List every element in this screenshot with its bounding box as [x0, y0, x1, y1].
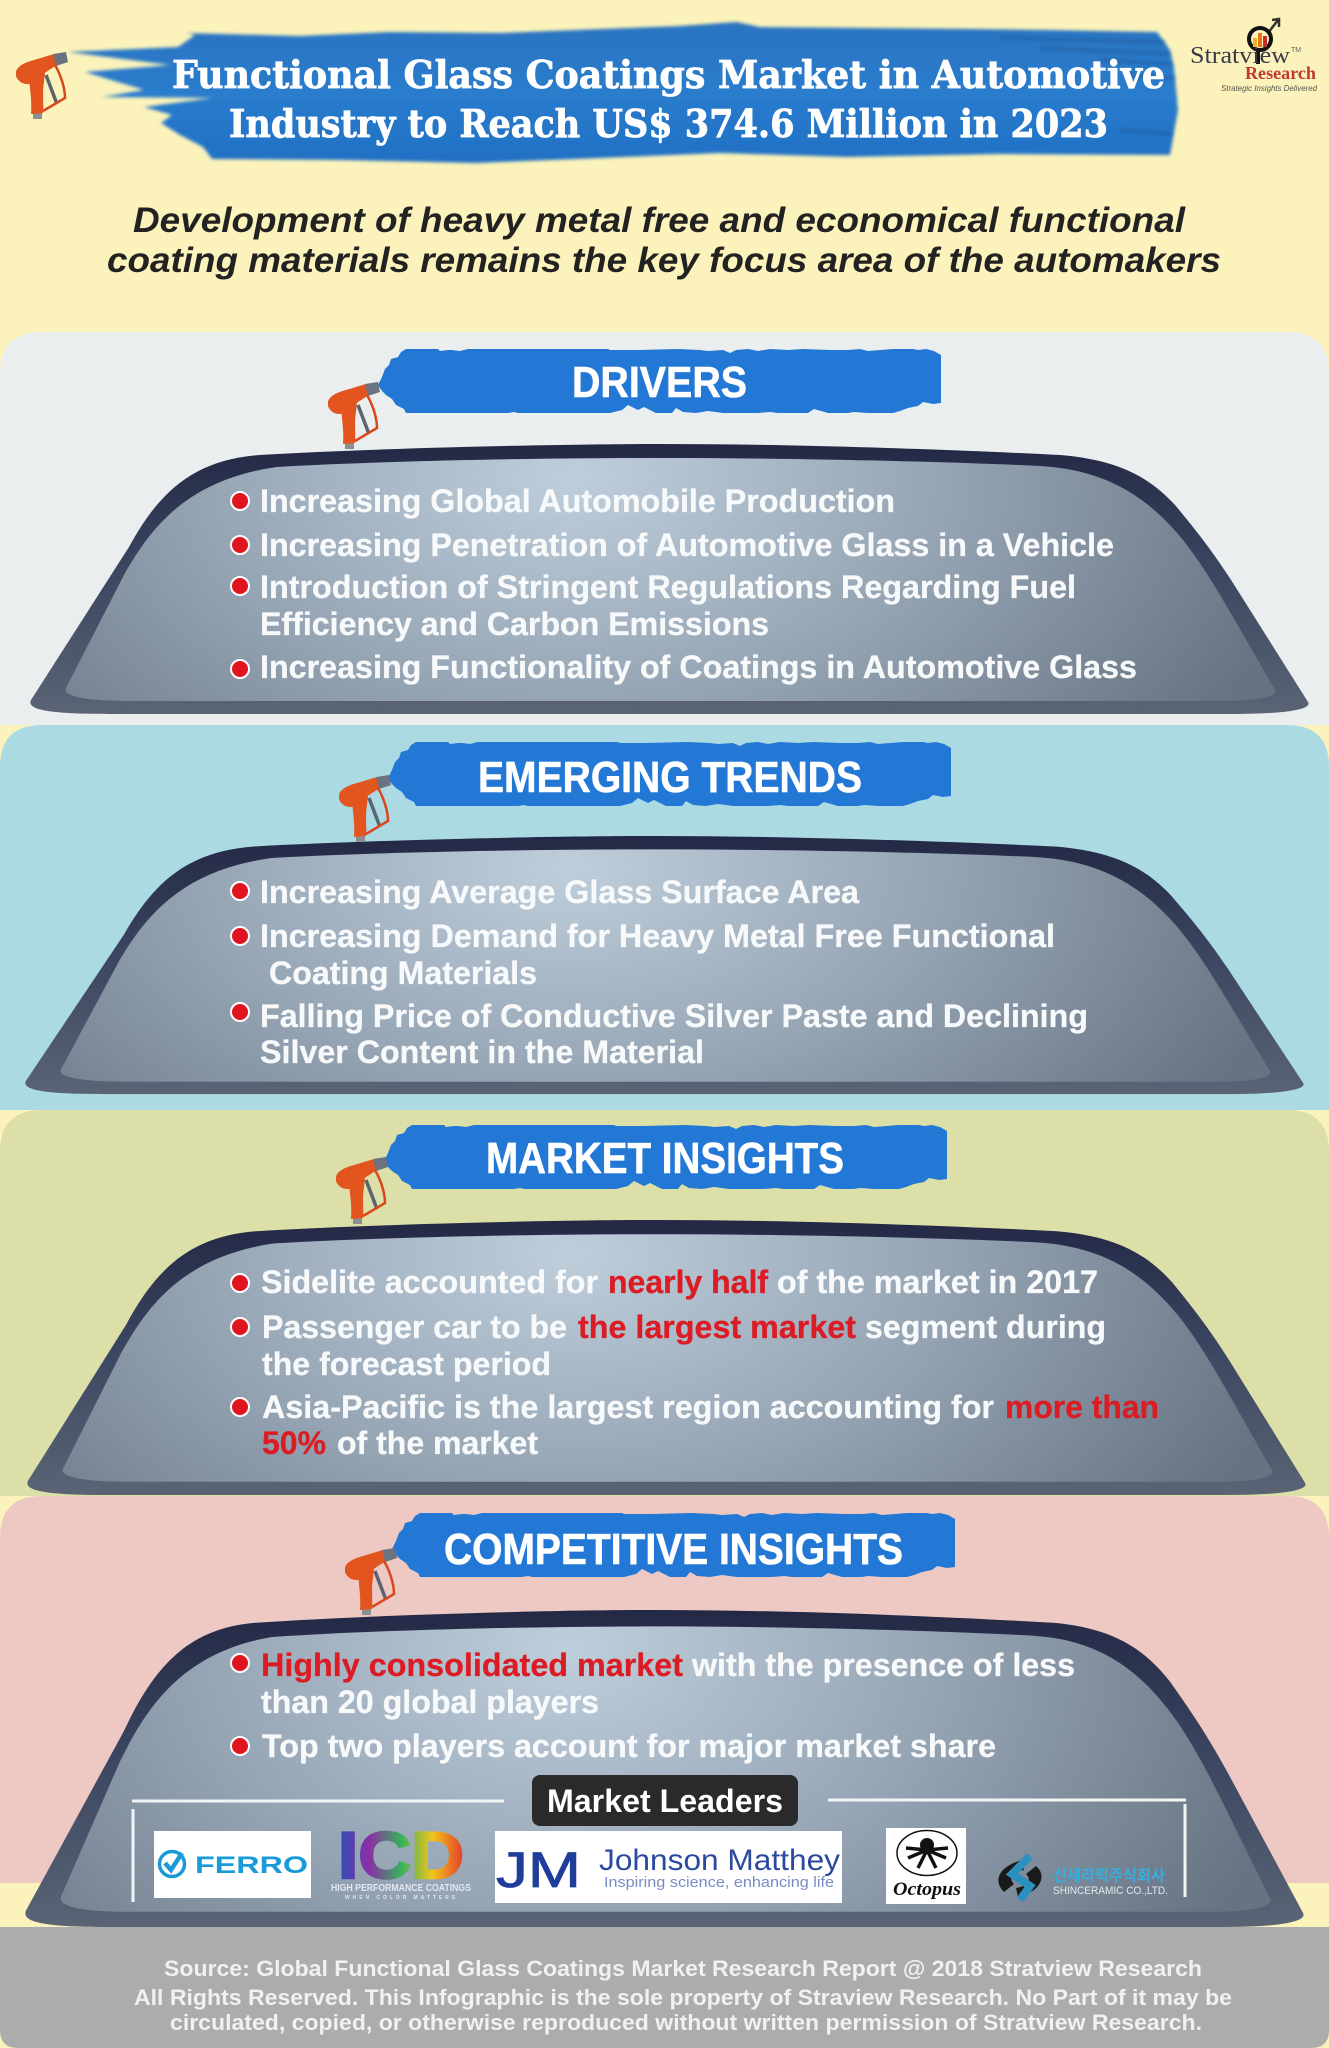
logo: Octopus [886, 1828, 966, 1904]
title: Industry to Reach US$ 374.6 Million in 2023 [229, 102, 1108, 147]
title: Functional Glass Coatings Market in Automotive [172, 53, 1165, 98]
logo: Shinceramic: SHINCERAMIC CO.,LTD. [1053, 1885, 1168, 1897]
title banner: blue brush stroke [68, 22, 1178, 163]
text block: market insights list: of the market in 2017 [777, 1264, 1098, 1300]
windshield: emerging trends [25, 836, 1304, 1094]
text block: drivers list: Increasing Global Automobile Production [260, 483, 895, 519]
text block: market insights list: of the market [337, 1425, 538, 1461]
logo: Octopus: Octopus [893, 1879, 961, 1900]
panel: footer source note: Source: Global Functional Glass Coatings Market Research Report @ 2018 Stratview Research [164, 1956, 1202, 1981]
text block: drivers list: Increasing Penetration of Automotive Glass in a Vehicle [260, 527, 1114, 563]
panel: footer source note: circulated, copied, or otherwise reproduced without written permission of Stratview Research. [170, 2010, 1202, 2035]
heading: market leaders [532, 1775, 798, 1826]
text block: market insights list: more than [1005, 1389, 1159, 1425]
heading: market leaders: Market Leaders [547, 1783, 783, 1819]
text block: competitive insights list: than 20 global players [261, 1684, 599, 1720]
panel: emerging trends [0, 725, 1329, 1110]
logo: Shinceramic: 신세라믹주식회사 [1053, 1862, 1165, 1886]
text block: market insights list: Asia-Pacific is the largest region accounting for [262, 1389, 994, 1425]
windshield: competitive insights [25, 1610, 1304, 1927]
text block: emerging trends list: Falling Price of Conductive Silver Paste and Declining [260, 998, 1088, 1034]
logo: Johnson Matthey [495, 1831, 842, 1903]
text block: market insights list: nearly half [608, 1264, 768, 1300]
text block: emerging trends list: Silver Content in the Material [260, 1034, 704, 1070]
panel: drivers [0, 332, 1329, 725]
market leaders bracket lines [132, 1800, 1186, 1902]
text block: market insights list [231, 1264, 1159, 1461]
text block: competitive insights list: with the presence of less [691, 1647, 1075, 1683]
logo: Shinceramic [998, 1856, 1168, 1900]
heading: competitive insights [392, 1513, 955, 1577]
text block: emerging trends list [231, 874, 1088, 1070]
logo: ICD: WHEN COLOR MATTERS [345, 1895, 456, 1901]
subtitle: Development of heavy metal free and economical functional [133, 201, 1186, 240]
icon: emerging trends spray gun [339, 775, 391, 842]
text block: drivers list [231, 483, 1137, 685]
logo: Ferro: FERRO [195, 1852, 308, 1879]
heading: competitive insights: COMPETITIVE INSIGHTS [444, 1525, 903, 1574]
panel: footer source note: All Rights Reserved. This Infographic is the sole property of Straview Research. No Part of it may be [134, 1985, 1232, 2010]
icon: drivers spray gun [328, 382, 380, 449]
heading: drivers: DRIVERS [572, 358, 747, 407]
logo: Stratview Research: Strategic Insights Delivered [1221, 83, 1317, 93]
panel: competitive insights [0, 1496, 1329, 1927]
windshield: market insights [27, 1220, 1306, 1495]
logo: ICD: ICD [338, 1818, 464, 1892]
text block: competitive insights list: Highly consolidated market [261, 1647, 683, 1683]
text block: emerging trends list: Increasing Demand for Heavy Metal Free Functional [260, 918, 1055, 954]
heading: drivers [378, 349, 941, 413]
icon: market insights spray gun [336, 1157, 388, 1224]
logo: Ferro [154, 1831, 311, 1898]
text block: emerging trends list: Increasing Average Glass Surface Area [260, 874, 859, 910]
heading: emerging trends: EMERGING TRENDS [478, 753, 862, 802]
title [172, 53, 1165, 147]
icon: competitive insights spray gun [345, 1548, 397, 1615]
text block: competitive insights list: Top two players account for major market share [262, 1728, 996, 1764]
text block: drivers list: Efficiency and Carbon Emissions [260, 606, 769, 642]
subtitle [107, 201, 1221, 280]
text block: competitive insights list [231, 1647, 1075, 1764]
logo: Stratview Research: Stratview [1190, 43, 1291, 69]
logo: Stratview Research: TM [1291, 47, 1301, 54]
heading: market insights: MARKET INSIGHTS [486, 1134, 844, 1183]
logo: Johnson Matthey: Johnson Matthey [599, 1844, 840, 1877]
logo: Stratview Research [1190, 19, 1317, 93]
text block: market insights list: Passenger car to be [262, 1309, 567, 1345]
logo: ICD: HIGH PERFORMANCE COATINGS [331, 1883, 471, 1894]
icon: header spray gun [16, 52, 68, 119]
panel: market insights [0, 1110, 1329, 1496]
text block: drivers list: Increasing Functionality of Coatings in Automotive Glass [260, 649, 1137, 685]
subtitle: coating materials remains the key focus area of the automakers [107, 241, 1221, 280]
text block: market insights list: 50% [262, 1425, 326, 1461]
panel: footer source note [0, 1927, 1329, 2048]
text block: drivers list: Introduction of Stringent Regulations Regarding Fuel [260, 569, 1076, 605]
text block: emerging trends list: Coating Materials [269, 955, 537, 991]
text block: market insights list: the largest market [578, 1309, 856, 1345]
heading: market insights [384, 1125, 947, 1189]
logo: Stratview Research: Research [1245, 63, 1316, 83]
text block: market insights list: segment during [865, 1309, 1106, 1345]
logo: Johnson Matthey: Inspiring science, enhancing life [604, 1874, 834, 1891]
windshield: drivers [30, 444, 1309, 714]
text block: market insights list: the forecast period [262, 1346, 551, 1382]
logo: Johnson Matthey: JM [496, 1842, 581, 1898]
heading: emerging trends [388, 742, 951, 806]
text block: market insights list: Sidelite accounted for [261, 1264, 598, 1300]
